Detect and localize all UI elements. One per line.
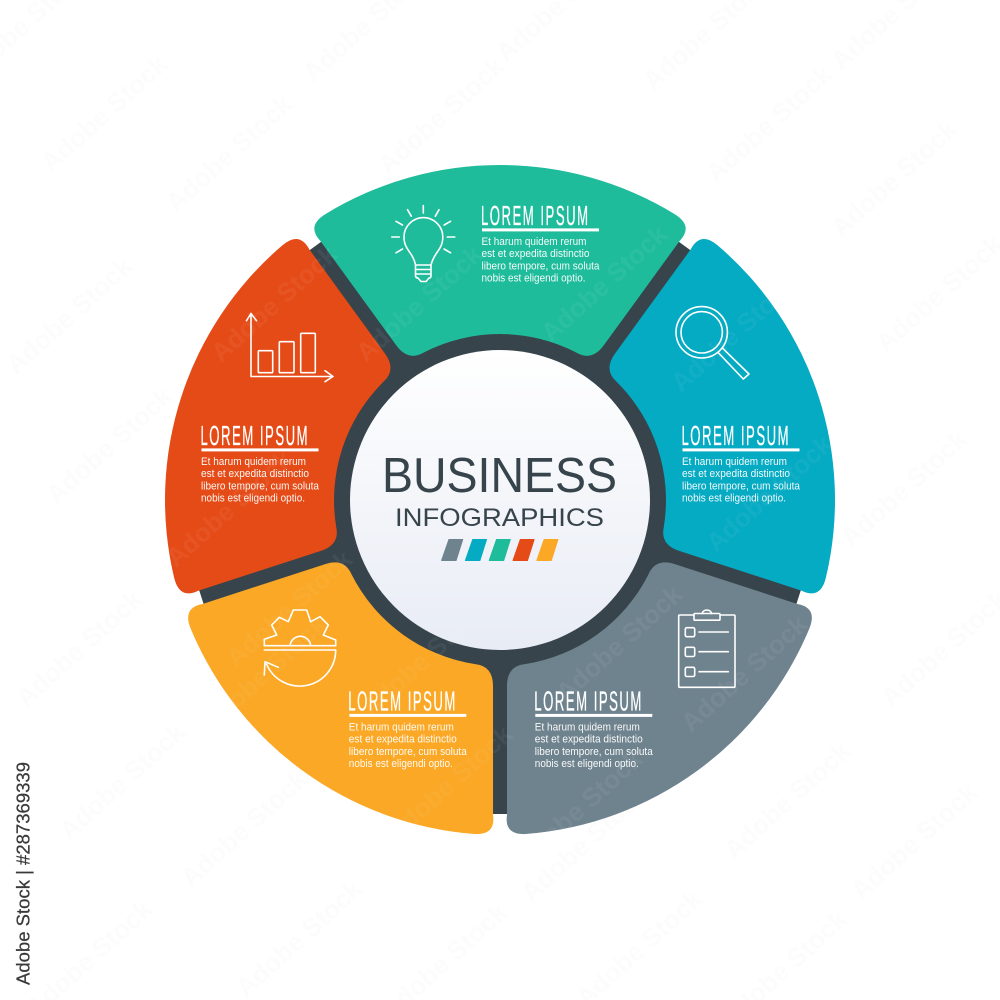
watermark pattern on background: Adobe Stock	[160, 89, 298, 218]
text block: gray	[534, 686, 653, 770]
dark hub with five spokes	[199, 241, 801, 814]
watermark pattern on panels: Adobe Stock	[380, 719, 518, 848]
panel: blue, search	[580, 220, 876, 632]
watermark pattern on panels: Adobe Stock	[665, 269, 803, 398]
watermark pattern on background: Adobe Stock	[0, 251, 138, 380]
body text: est et expedita distinctio	[349, 734, 457, 746]
watermark pattern on panels: Adobe Stock	[350, 239, 488, 368]
body text: nobis est eligendi optio.	[482, 273, 586, 285]
watermark pattern on panels: Adobe Stock	[195, 609, 333, 738]
panel: gray, checklist	[435, 507, 847, 880]
watermark pattern on panels: Adobe Stock	[675, 609, 813, 738]
red segment	[124, 220, 420, 632]
heading: LOREM IPSUM	[534, 686, 641, 717]
watermark pattern on background: Adobe Stock	[53, 717, 191, 846]
body text: Et harum quidem rerum	[535, 722, 640, 734]
heading underline	[682, 448, 800, 451]
icon: clipboard checklist	[679, 610, 735, 687]
body text	[535, 722, 653, 770]
body text: libero tempore, cum soluta	[201, 480, 319, 492]
icon: bar chart	[246, 314, 333, 382]
watermark pattern on panels	[160, 219, 838, 873]
watermark pattern on background: Adobe Stock	[835, 424, 973, 553]
heading: LOREM IPSUM	[682, 421, 789, 451]
watermark pattern on background: Adobe Stock	[372, 51, 510, 180]
text block: yellow	[348, 686, 467, 770]
body text: Et harum quidem rerum	[482, 236, 587, 248]
icon: light bulb	[392, 206, 455, 282]
gray segment	[435, 507, 847, 880]
icon: gear with cycle arrow	[264, 610, 336, 686]
body text: libero tempore, cum soluta	[482, 260, 600, 272]
text block: blue	[682, 421, 800, 505]
watermark pattern on background: Adobe Stock	[175, 764, 313, 893]
yellow segment	[153, 507, 565, 880]
panel: yellow, settings	[153, 507, 565, 880]
watermark pattern on panels: Adobe Stock	[510, 744, 648, 873]
body text: libero tempore, cum soluta	[349, 746, 467, 758]
panel: green, idea	[314, 165, 686, 356]
watermark pattern on panels: Adobe Stock	[355, 594, 493, 723]
heading: LOREM IPSUM	[200, 421, 308, 451]
heading: LOREM IPSUM	[348, 686, 455, 717]
body text: nobis est eligendi optio.	[535, 758, 639, 770]
heading underline	[202, 448, 318, 451]
icon: magnifying glass	[676, 307, 749, 379]
watermark pattern on background: Adobe Stock	[10, 584, 148, 713]
watermark pattern on background: Adobe Stock	[230, 874, 368, 1000]
watermark pattern on panels: Adobe Stock	[160, 444, 298, 573]
text block: green	[481, 201, 600, 285]
watermark pattern on panels: Adobe Stock	[205, 239, 343, 368]
watermark pattern on panels: Adobe Stock	[700, 429, 838, 558]
subtitle: INFOGRAPHICS: INFOGRAPHICS	[395, 504, 604, 532]
blue segment	[580, 220, 876, 632]
body text: nobis est eligendi optio.	[201, 493, 305, 505]
heading underline	[349, 714, 466, 717]
body text: nobis est eligendi optio.	[349, 758, 453, 770]
watermark pattern on background: Adobe Stock	[515, 779, 653, 908]
green segment	[314, 165, 686, 356]
body text: est et expedita distinctio	[482, 248, 590, 260]
body text: est et expedita distinctio	[682, 468, 790, 480]
watermark pattern on background: Adobe Stock	[700, 59, 838, 188]
heading: LOREM IPSUM	[481, 201, 588, 231]
watermark pattern on background: Adobe Stock	[718, 736, 856, 865]
body text: Et harum quidem rerum	[682, 456, 787, 468]
body text: est et expedita distinctio	[201, 468, 309, 480]
panel: red, chart	[124, 220, 420, 632]
title: BUSINESS: BUSINESS	[382, 448, 617, 503]
body text	[349, 722, 467, 770]
body text	[482, 236, 600, 285]
watermark pattern on background: Adobe Stock	[35, 49, 173, 178]
body text	[201, 456, 319, 505]
center disc	[350, 350, 650, 650]
heading underline	[482, 228, 599, 231]
body text: libero tempore, cum soluta	[535, 746, 653, 758]
heading underline	[535, 714, 652, 717]
body text	[682, 456, 800, 505]
color swatches	[442, 540, 558, 560]
watermark pattern on background: Adobe Stock	[845, 777, 983, 906]
watermark pattern on panels: Adobe Stock	[220, 544, 358, 673]
watermark pattern on panels: Adobe Stock	[550, 579, 688, 708]
center circle	[350, 350, 650, 650]
watermark pattern on background: Adobe Stock	[40, 381, 178, 510]
watermark pattern on background: Adobe Stock	[825, 114, 963, 243]
body text: nobis est eligendi optio.	[682, 493, 786, 505]
side credit text: Adobe Stock | #287369339	[14, 762, 34, 985]
watermark pattern on panels: Adobe Stock	[535, 219, 673, 348]
text block: red	[200, 421, 319, 505]
body text: Et harum quidem rerum	[349, 722, 454, 734]
body text: Et harum quidem rerum	[201, 456, 306, 468]
body text: libero tempore, cum soluta	[682, 480, 800, 492]
body text: est et expedita distinctio	[535, 734, 643, 746]
